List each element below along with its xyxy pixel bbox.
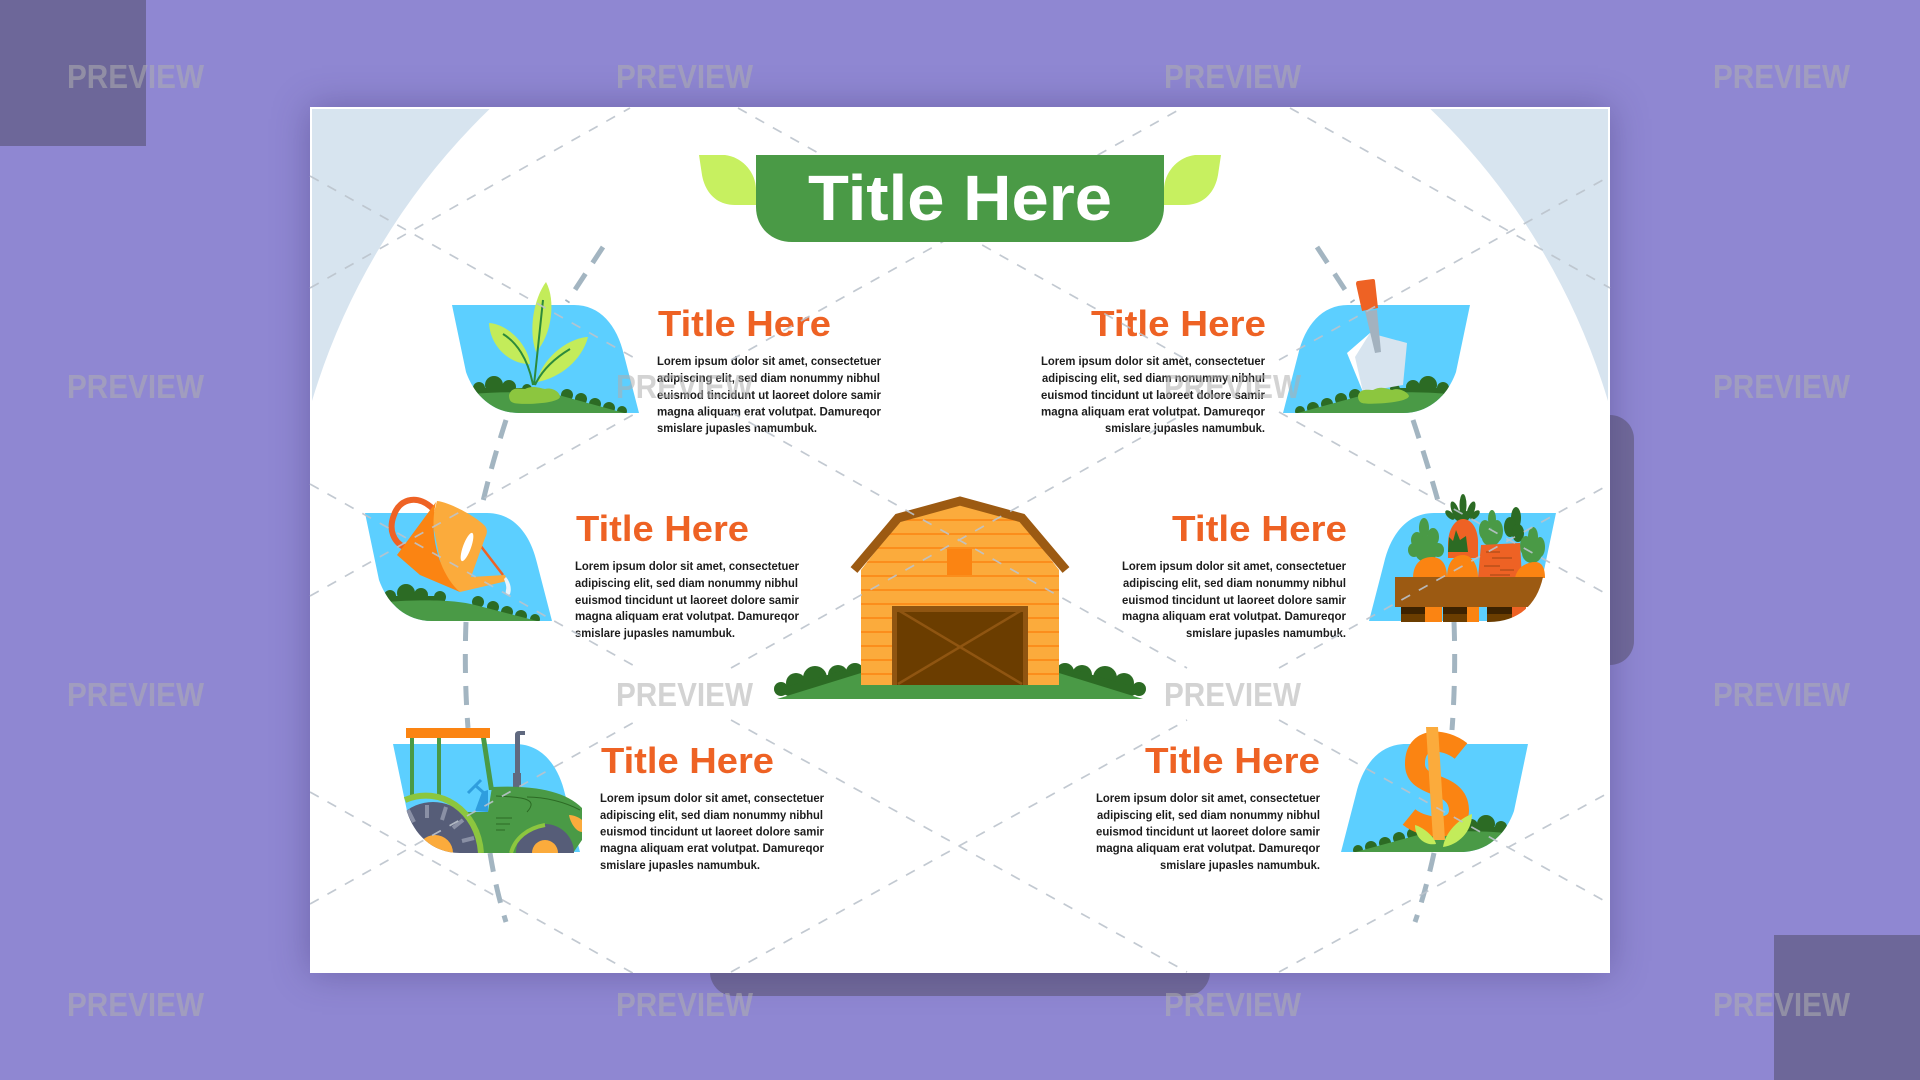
watermark text: PREVIEW bbox=[616, 986, 754, 1023]
watermark text: PREVIEW bbox=[1164, 368, 1302, 405]
barn wall bbox=[861, 505, 1059, 685]
icon: dollar sign bbox=[1341, 727, 1528, 855]
text block: adipiscing elit, sed diam nonummy nibhul bbox=[600, 808, 823, 822]
icon: sprout bbox=[452, 282, 639, 416]
text block: euismod tincidunt ut laoreet dolore samir bbox=[1096, 824, 1320, 838]
decorative tab: right bbox=[1500, 415, 1634, 665]
ground bbox=[777, 673, 1143, 699]
icon: tractor bbox=[388, 728, 582, 853]
heading: Title Here bbox=[1172, 508, 1347, 549]
text block: adipiscing elit, sed diam nonummy nibhul bbox=[1097, 808, 1320, 822]
watermark text: PREVIEW bbox=[616, 368, 754, 405]
heading: Title Here bbox=[658, 303, 831, 344]
watermark text: PREVIEW bbox=[1164, 986, 1302, 1023]
text block: magna aliquam erat volutpat. Damureqor bbox=[575, 609, 799, 623]
decorative tab: bottom bbox=[710, 900, 1210, 996]
item 4: shovel bbox=[1041, 279, 1470, 435]
text block: euismod tincidunt ut laoreet dolore samir bbox=[600, 824, 824, 838]
icon: shovel bbox=[1283, 279, 1470, 416]
icon: watering can bbox=[365, 500, 552, 624]
heading: Title Here bbox=[1145, 740, 1320, 781]
watermark lattice bbox=[310, 108, 1610, 976]
text block: smislare jupasles namumbuk. bbox=[1186, 626, 1346, 640]
text block: Lorem ipsum dolor sit amet, consectetuer bbox=[600, 791, 824, 805]
watermark text: PREVIEW bbox=[616, 58, 754, 95]
watermark text: PREVIEW bbox=[67, 368, 205, 405]
text block: Lorem ipsum dolor sit amet, consectetuer bbox=[575, 559, 799, 573]
watermark text: PREVIEW bbox=[1713, 986, 1851, 1023]
item 1: sprout bbox=[452, 282, 881, 435]
text block bbox=[657, 354, 881, 435]
barn window bbox=[947, 549, 972, 575]
heading: Title Here bbox=[601, 740, 774, 781]
watermark text: PREVIEW bbox=[67, 58, 205, 95]
text block bbox=[575, 559, 799, 640]
banner leaf left bbox=[699, 155, 756, 205]
text block: Lorem ipsum dolor sit amet, consectetuer bbox=[1122, 559, 1346, 573]
heading: Title Here bbox=[576, 508, 749, 549]
watermark text: PREVIEW bbox=[1713, 368, 1851, 405]
icon: carrots crate bbox=[1369, 494, 1556, 623]
card background bbox=[310, 107, 1610, 973]
decorative square: bottom right bbox=[1774, 935, 1920, 1080]
watermark text: PREVIEW bbox=[1713, 676, 1851, 713]
text block: Lorem ipsum dolor sit amet, consectetuer bbox=[1096, 791, 1320, 805]
text block: euismod tincidunt ut laoreet dolore samir bbox=[1122, 593, 1346, 607]
text block: magna aliquam erat volutpat. Damureqor bbox=[1096, 841, 1320, 855]
text block: adipiscing elit, sed diam nonummy nibhul bbox=[657, 371, 880, 385]
text block: smislare jupasles namumbuk. bbox=[600, 858, 760, 872]
heading: Title Here bbox=[1091, 303, 1266, 344]
item 5: carrots crate bbox=[1122, 494, 1556, 640]
title banner bbox=[699, 155, 1221, 242]
text block: smislare jupasles namumbuk. bbox=[1105, 421, 1265, 435]
barn door bbox=[892, 606, 1028, 685]
text block: Lorem ipsum dolor sit amet, consectetuer bbox=[657, 354, 881, 368]
watermark text: PREVIEW bbox=[67, 676, 205, 713]
banner leaf right bbox=[1164, 155, 1221, 205]
banner ribbon bbox=[756, 155, 1164, 242]
watermark text: PREVIEW bbox=[1713, 58, 1851, 95]
text block: magna aliquam erat volutpat. Damureqor bbox=[1122, 609, 1346, 623]
text block: adipiscing elit, sed diam nonummy nibhul bbox=[1123, 576, 1346, 590]
text block: magna aliquam erat volutpat. Damureqor bbox=[1041, 404, 1265, 418]
text block bbox=[1041, 354, 1265, 435]
watermark text: PREVIEW bbox=[1164, 58, 1302, 95]
text block: euismod tincidunt ut laoreet dolore samir bbox=[575, 593, 799, 607]
main title: Title Here bbox=[808, 162, 1112, 234]
text block: Lorem ipsum dolor sit amet, consectetuer bbox=[1041, 354, 1265, 368]
text block: euismod tincidunt ut laoreet dolore samir bbox=[657, 388, 881, 402]
text block: adipiscing elit, sed diam nonummy nibhul bbox=[1042, 371, 1265, 385]
dashed ring connecting icons bbox=[465, 247, 1455, 922]
text block bbox=[600, 791, 824, 872]
bushes bbox=[774, 663, 1146, 697]
text block: smislare jupasles namumbuk. bbox=[657, 421, 817, 435]
item 3: tractor bbox=[388, 728, 824, 872]
text block: smislare jupasles namumbuk. bbox=[1160, 858, 1320, 872]
watermark text: PREVIEW bbox=[67, 986, 205, 1023]
watermark text: PREVIEW bbox=[1164, 676, 1302, 713]
item 6: dollar sign bbox=[1096, 727, 1528, 872]
text block: euismod tincidunt ut laoreet dolore samir bbox=[1041, 388, 1265, 402]
item 2: watering can bbox=[365, 500, 799, 640]
text block: magna aliquam erat volutpat. Damureqor bbox=[657, 404, 881, 418]
central barn bbox=[774, 501, 1146, 699]
barn roof bbox=[854, 501, 1066, 570]
watermark text: PREVIEW bbox=[616, 676, 754, 713]
decorative square: top left bbox=[0, 0, 146, 146]
text block bbox=[1122, 559, 1346, 640]
card corner backdrop bbox=[312, 109, 1608, 401]
text block: magna aliquam erat volutpat. Damureqor bbox=[600, 841, 824, 855]
text block bbox=[1096, 791, 1320, 872]
text block: adipiscing elit, sed diam nonummy nibhul bbox=[575, 576, 798, 590]
text block: smislare jupasles namumbuk. bbox=[575, 626, 735, 640]
